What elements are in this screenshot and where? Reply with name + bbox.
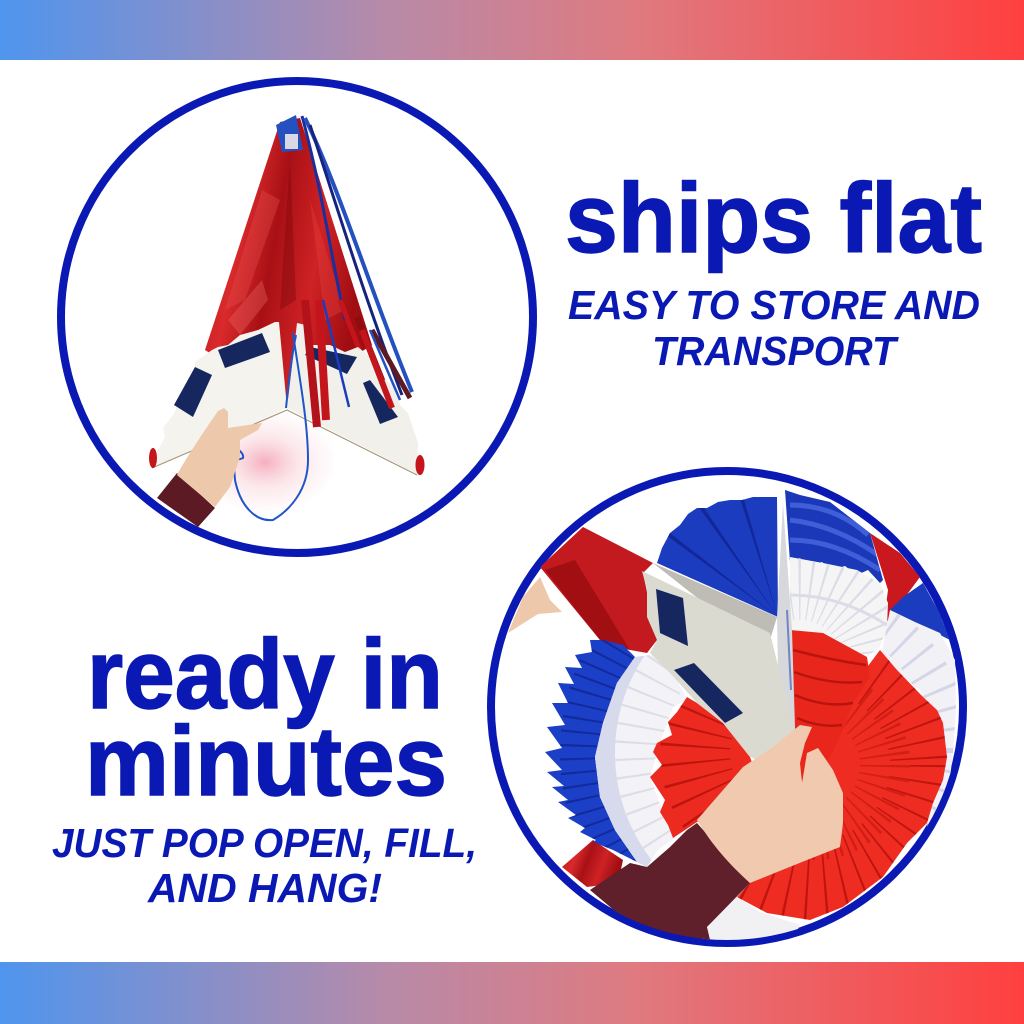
subheading: just pop open, fill, and hang: JUST POP OPEN, FILL, [52,820,477,866]
folded white card panels [149,322,424,475]
honeycomb: top right blue [785,490,883,583]
honeycomb: centre red column [792,630,868,740]
hand [697,725,843,883]
red foil cone behind [540,527,920,887]
honeycomb: top blue fan [657,497,778,616]
red foil cone [205,115,372,400]
subheading: just pop open, fill, and hang: AND HANG! [147,865,382,911]
subheading: easy to store and transport [568,282,980,374]
heading: ready in minutes: ready in [87,619,443,729]
honeycomb: left red [650,697,752,838]
honeycomb: left white [595,655,686,867]
subheading: easy to store and transport: EASY TO STORE AND [568,282,980,328]
subheading: easy to store and transport: TRANSPORT [652,328,899,374]
bottom gradient bar [0,962,1024,1024]
card panel [642,571,802,783]
heading: ready in minutes: minutes [85,706,447,816]
honeycomb: right white rim [882,610,956,826]
hand [177,408,262,507]
heading: ships flat: ships flat [565,163,982,273]
honeycomb: bottom white [702,897,800,940]
left hand holding cone [508,577,562,633]
honeycomb: right big red [737,650,947,920]
navy adhesive patches [656,589,743,723]
front streamers [305,300,400,427]
sleeve [590,823,750,940]
blue hanging string [234,332,309,522]
spine [653,503,802,783]
photo circle: opened decoration [491,471,995,958]
heading: ready in minutes [85,619,447,816]
sleeve [157,473,215,527]
honeycomb: right blue rim [890,583,950,640]
navy adhesive patches [174,333,398,424]
top gradient bar [0,0,1024,60]
honeycomb: top right white [790,557,888,656]
photo circle: flat-packed decoration [61,81,533,553]
honeycomb: left blue [545,640,637,862]
blue and red streamers [302,116,412,405]
subheading: just pop open, fill, and hang [52,820,477,911]
